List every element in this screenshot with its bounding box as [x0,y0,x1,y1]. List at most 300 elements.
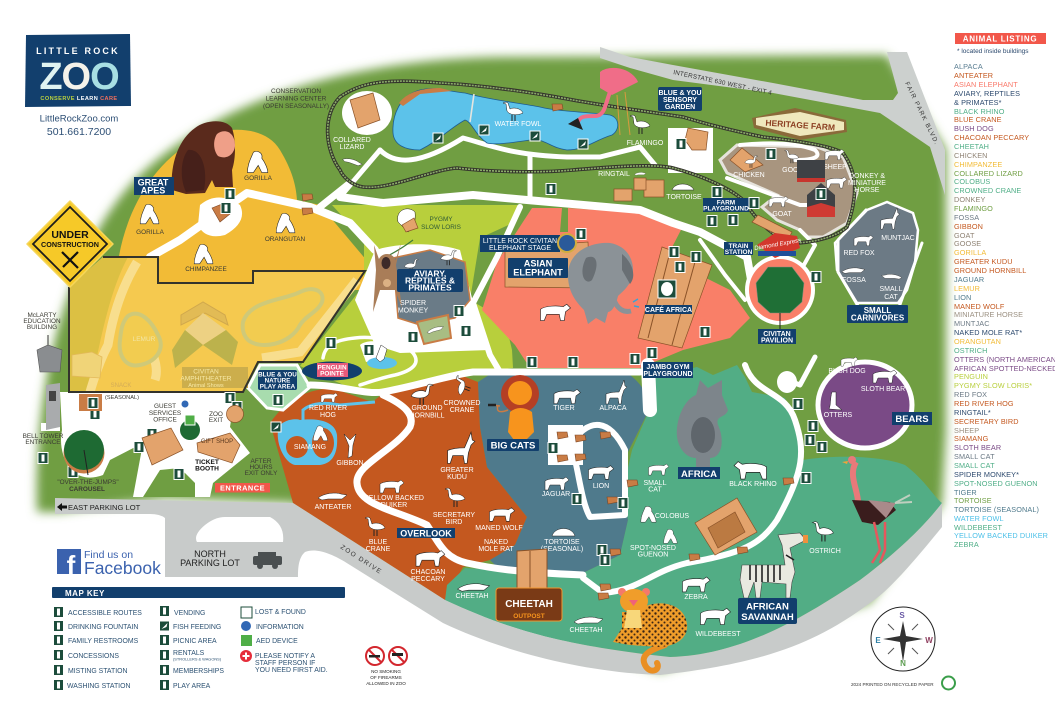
faded lemur island [120,314,161,365]
animal: ground hornbill: HORNBILL [409,412,445,420]
animal: sheep [823,149,847,171]
label: after hours exit only: AFTER [251,458,272,465]
sign: heritage farm: HERITAGE FARM [765,118,835,132]
animal: red fox [843,235,875,257]
AED icon [185,415,195,425]
label: spider monkey: SPIDER [400,300,426,307]
animal: tortoise seasonal: (SEASONAL) [541,546,583,553]
animal listing: NAKED MOLE RAT* [954,328,1022,337]
animal: red river hog [309,393,347,419]
animal: small cat africa [644,464,669,494]
building: mclarty [37,335,62,372]
label: conservation learning center: (OPEN SEASONALLY) [263,103,329,110]
animal: chicken: CHICKEN [733,172,765,179]
animal: yellow backed duiker: DUIKER [381,502,407,509]
animal listing: SIAMANG [954,434,989,443]
animal: tortoise seasonal [541,528,583,553]
label: blue and you sensory garden [658,87,702,111]
animal: collared lizard: LIZARD [340,144,364,151]
animal listing: CHEETAH [954,142,989,151]
label: after hours exit only: HOURS [249,464,273,471]
no smoking and no firearms: OF FIREARMS [370,675,402,680]
animal listing: CHICKEN [954,151,988,160]
road label: zoo drive: ZOO DRIVE [339,544,383,576]
label: african savannah [738,598,797,624]
animal: tortoise: TORTOISE [666,194,702,201]
facebook badge: Facebook [84,558,161,578]
animal: lion icon: LION [593,483,609,490]
animal: colobus: COLOBUS [655,513,689,520]
zone: farm dirt [720,145,857,237]
label: naked mole rat: MOLE RAT [478,546,514,553]
animal listing: ASIAN ELEPHANT [954,80,1018,89]
label: blue and you nature play area: BLUE & YOU [258,372,297,378]
title logo [25,34,131,107]
label: naked mole rat [478,539,514,553]
building: africa tent [695,498,757,555]
label: blue and you nature play area: PLAY AREA [260,384,296,390]
animal: secretary bird: BIRD [446,519,462,526]
website and phone [40,114,118,138]
building: goat barn [797,160,825,182]
key column 2: PICNIC AREA [173,638,217,645]
pavilion [749,259,811,330]
label: zoo exit: ZOO [209,411,223,418]
animal: gorilla west: GORILLA [136,229,165,236]
label: mclarty education building: BUILDING [27,324,57,331]
building: cafe africa [638,247,712,348]
animal: collared lizard: COLLARED [333,137,371,144]
carousel [64,430,104,475]
animal listing: DONKEY [954,195,985,204]
animal: jaguar [542,477,570,498]
key column 2: VENDING [174,610,205,617]
label: asian elephant [508,258,568,278]
label: spider monkey: MONKEY [398,308,428,314]
label: civitan pavilion: CIVITAN [763,331,791,338]
animal listing: GORILLA [954,248,986,257]
animal: gorilla west [136,204,165,236]
parking island [196,517,283,542]
animal: sloth bear: SLOTH BEAR [861,386,905,393]
animal: black rhino: BLACK RHINO [729,481,777,488]
label: civitan pavilion [758,329,796,344]
north parking lot label [180,549,240,568]
animal: yellow backed duiker [364,480,424,509]
animal: pygmy slow loris [398,209,461,232]
key column 2: FISH FEEDING [173,624,221,631]
animal: ringtail [598,171,646,178]
east parking lot label: EAST PARKING LOT [68,503,141,512]
animal: small cat carnivores: CAT [884,294,898,301]
compass: S [899,611,905,620]
label: penguin pointe: PENGUIN [317,364,347,372]
animal: donkey and miniature horse: DONKEY & [849,173,885,180]
animal listing: ZEBRA [954,540,979,549]
label: aviary reptiles and primates: PRIMATES [408,282,452,292]
compass [871,607,935,671]
key column 3: LOST & FOUND [255,609,306,616]
illustration: spider monkey [373,240,413,312]
lake bridge [470,94,474,122]
key column 2: PLAY AREA [173,683,211,690]
animal listing: PENGUIN [954,372,988,381]
animal: gibbon [336,434,364,467]
animal: gorilla east [244,151,273,182]
animal: spot-nosed guenon: SPOT-NOSED [630,545,676,552]
label: africa: AFRICA [681,469,717,480]
animal: ostrich [809,522,841,555]
label: conservation learning center: CONSERVATION [271,88,321,95]
animal listing: SHEEP [954,426,979,435]
label: farm playground: FARM [717,200,735,206]
building: tortoise shelters [614,178,664,201]
animal listing: GOAT [954,231,975,240]
animal listing: WILDEBEEST [954,523,1002,532]
label: asian elephant: ELEPHANT [513,268,563,278]
animal: penguin [376,345,387,362]
label: farm playground: PLAYGROUND [703,206,749,212]
animal: cheetah west: CHEETAH [456,593,488,600]
siamang moat [278,402,375,465]
animal listing: CROWNED CRANE [954,186,1021,195]
plaza pavement [60,392,250,497]
animal listing: ANTEATER [954,71,993,80]
animal: otters: OTTERS [824,412,853,419]
animal listing: GIBBON [954,222,983,231]
animal: chacoan peccary: PECCARY [411,576,445,583]
label: small carnivores: SMALL [864,306,891,315]
label: little rock civitan elephant stage [480,235,560,252]
faded olive band [69,257,128,392]
compass: W [925,636,933,645]
zone: big cats slate [478,373,648,573]
key column 3: PLEASE NOTIFY A [255,653,315,660]
label: aviary reptiles and primates: REPTILES & [405,276,455,286]
animal: red fox: RED FOX [843,250,875,257]
label: snack stand: SNACK [111,383,131,389]
animal: gorilla east: GORILLA [244,175,273,182]
animal: bush dog: BUSH DOG [828,368,866,375]
illustration: cheetah outpost [496,549,562,621]
illustration: big ostrich [842,456,912,563]
animal: red river hog: RED RIVER [309,405,347,412]
label: small carnivores [847,305,908,323]
animal: tortoise seasonal: TORTOISE [544,539,580,546]
label: blue and you sensory garden: BLUE & YOU [658,90,702,97]
facebook badge: Find us on [84,549,133,561]
faded stand [72,352,102,378]
animal listing: TORTOISE (SEASONAL) [954,505,1039,514]
label: train station: TRAIN [729,243,749,250]
no smoking and no firearms: NO SMOKING [371,669,401,674]
label: conservation learning center [263,88,329,110]
animal: goose [782,150,808,174]
animal listing: ALPACA [954,62,983,71]
illustration: rhino [677,380,728,467]
shelter: apes picnic [212,204,230,222]
animal: donkey and miniature horse: HORSE [855,187,880,194]
label: penguin pointe: POINTE [320,370,345,378]
building: learning center [350,93,380,128]
animal: otters [824,392,853,419]
animal: tiger [553,389,580,412]
stage: elephant stage [505,242,590,288]
animal listing: MANED WOLF [954,302,1005,311]
label: carousel [57,479,119,493]
animal: water fowl [495,102,541,128]
label: aviary reptiles and primates [397,268,463,292]
icon: parking jeep [253,552,282,569]
animal: maned wolf: MANED WOLF [475,525,523,532]
key column 2 [160,606,224,690]
animal: small cat carnivores: SMALL [880,286,903,293]
zone: asian elephant salmon [482,208,750,368]
label: carousel: CAROUSEL [69,486,105,493]
website and phone: 501.661.7200 [47,126,111,138]
label: naked mole rat: NAKED [484,539,508,546]
faded pond [243,289,323,345]
animal listing: BLUE CRANE [954,115,1002,124]
animal listing: WATER FOWL [954,514,1004,523]
north parking lot label: PARKING LOT [180,558,240,568]
label: train station: STATION [725,249,753,256]
animal listing: FOSSA [954,213,979,222]
animal: crowned crane: CRANE [450,407,475,414]
animal listing: ORANGUTAN [954,337,1001,346]
animal: siamang: SIAMANG [294,444,326,451]
map key [52,587,345,690]
label: african savannah: AFRICAN [746,602,789,612]
label: jambo gym playground [643,362,693,378]
animal: small cat carnivores [880,274,903,301]
facebook badge [57,549,161,580]
key column 2: MEMBERSHIPS [173,668,224,675]
animal listing: GROUND HORNBILL [954,266,1026,275]
animal listing: LEMUR [954,284,980,293]
label: civitan pavilion: PAVILION [761,338,793,344]
faded amphitheater [172,302,238,368]
animal: tortoise [666,184,702,201]
animal listing: FLAMINGO [954,204,993,213]
animal listing: BLACK RHINO [954,107,1005,116]
label: ticket booth [195,459,219,472]
label: blue and you nature play area [258,370,297,390]
zone: overlook brown [270,375,527,600]
key column 1: ACCESSIBLE ROUTES [68,610,142,617]
animal listing: SPOT-NOSED GUENON [954,479,1038,488]
label: bell tower entrance [23,433,64,446]
animal: asian elephant icon [540,304,570,320]
animal: donkey and miniature horse: MINIATURE [848,180,886,187]
label: great apes: APES [141,186,165,196]
animal: muntjac: MUNTJAC [881,235,915,242]
lawn hump [143,468,195,497]
animal listing: TORTOISE [954,496,992,505]
animal listing: RED FOX [954,390,987,399]
key column 3: YOU NEED FIRST AID. [255,667,328,674]
animal: cheetah west [456,584,490,600]
sign: heritage farm [752,108,847,140]
animal listing: SPIDER MONKEY* [954,470,1019,479]
label: train station [724,242,753,256]
label: mclarty education building: EDUCATION [23,318,61,325]
key column 1: FAMILY RESTROOMS [68,638,139,645]
park grounds base [37,55,946,672]
label: farm playground [703,198,749,212]
animal: secretary bird [433,488,475,526]
key column 1 [54,606,142,690]
animal listing: BUSH DOG [954,124,994,133]
animal listing: GOOSE [954,239,981,248]
animal: greater kudu: GREATER [440,467,474,474]
animal: pygmy slow loris: PYGMY [429,216,453,223]
key column 2: RENTALS [173,650,205,657]
animal: gibbon: GIBBON [336,460,364,467]
zone: nature play area [248,365,310,410]
label: bell tower entrance: BELL TOWER [23,433,64,440]
road label: fair park: FAIR PARK BLVD. [903,81,940,147]
animal: secretary bird: SECRETARY [433,512,475,519]
key column 3: STAFF PERSON IF [255,660,315,667]
gift shop building: GIFT SHOP [201,439,233,445]
guest services building [142,400,188,465]
label: snack stand: (SEASONAL) [105,395,139,401]
compass: N [900,659,906,668]
faded paths [90,262,357,392]
label: cafe africa: CAFÉ AFRICA [645,305,692,314]
map key bar [52,587,345,598]
illustration: cheetah outpost: CHEETAH [505,599,553,610]
animal: cheetah east: CHEETAH [570,627,602,634]
animal listing [954,62,1055,549]
compass: E [875,636,881,645]
label: small carnivores: CARNIVORES [851,314,905,322]
animal: goose: GOOSE [782,167,808,174]
faded amphitheater label: AMPHITHEATER [180,376,232,382]
animal: blue crane: BLUE [369,539,387,546]
ticket booth roof [180,420,200,440]
animal: flamingo: FLAMINGO [627,140,664,147]
animal: chacoan peccary [410,551,446,583]
animal: maned wolf [475,508,523,532]
animal: colobus [641,506,689,522]
animal: lion icon [588,466,614,490]
animal listing: SMALL CAT [954,452,995,461]
seal: civitan [558,234,576,252]
animal: chimpanzee: CHIMPANZEE [185,266,227,273]
under construction sign: CONSTRUCTION [41,240,99,249]
animal: orangutan: ORANGUTAN [265,236,306,243]
illustration: big elephant [568,243,639,324]
label: great apes: GREAT [138,178,169,188]
label: great apes [134,177,174,196]
label: mclarty education building: McLARTY [27,312,57,319]
label: blue and you sensory garden: SENSORY [663,97,697,104]
label: guest services office: OFFICE [153,416,177,424]
label: jambo gym playground: JAMBO GYM [646,364,690,371]
under construction sign: UNDER [51,229,89,241]
animal: fossa [842,268,866,284]
animal: cheetah east [570,617,603,634]
animal listing: RINGTAIL* [954,408,991,417]
animal: donkey and miniature horse [826,173,886,194]
key column 1: MISTING STATION [68,668,127,675]
animal: orangutan [265,213,306,243]
animal: siamang [294,426,328,451]
animal listing: SLOTH BEAR [954,443,1001,452]
animal: muntjac [881,208,915,242]
animal listing: OTTERS (NORTH AMERICAN [954,355,1055,364]
animal: zebra: ZEBRA [684,594,708,601]
label: overlook: OVERLOOK [400,528,452,538]
zone: lime aviary area [300,205,520,392]
animal: zebra [682,577,710,601]
label: blue and you nature play area: NATURE [265,378,290,384]
animal listing: SMALL CAT [954,461,995,470]
animal: red river hog: HOG [320,412,336,419]
illustration: big flamingo [568,68,638,135]
animal: small cat africa: SMALL [644,480,667,487]
road: zoo drive and parking lots [55,498,942,675]
zone: bears [818,362,912,448]
animal: alpaca [599,380,627,412]
zone: africa and savannah green [445,365,942,657]
animal listing: COLOBUS [954,177,990,186]
website and phone: LittleRockZoo.com [40,114,118,124]
key column 3: INFORMATION [256,624,304,631]
animal: crowned crane: CROWNED [444,400,480,407]
animal listing: AVIARY, REPTILES [954,89,1020,98]
road: interstate 630 and fair park blvd [600,47,945,195]
label: snack stand [105,383,139,401]
lakeside rocks [399,88,452,106]
animal: goat: GOAT [772,211,792,218]
faded lemur label: LEMUR [133,336,156,343]
label: zoo exit [209,411,223,424]
under construction area [69,257,365,392]
animal: blue crane [365,517,391,553]
animal: small cat africa: CAT [648,486,662,494]
animal listing: GREATER KUDU [954,257,1013,266]
pavement blobs [198,91,815,465]
label: guest services office: SERVICES [149,410,181,417]
animal: spot-nosed guenon [630,529,677,558]
faded amphitheater label: Animal Shows [188,383,224,389]
label: mclarty education building [23,312,61,331]
road label: interstate: INTERSTATE 630 WEST - EXIT 4 [673,69,773,97]
map key bar: MAP KEY [65,589,105,598]
animal: goat [769,196,792,218]
animal listing: CHIMPANZEE [954,160,1002,169]
building: train station [752,215,792,240]
railroad [328,81,855,243]
label: ticket booth: TICKET [195,459,219,466]
animal: ostrich: OSTRICH [809,548,841,555]
animal listing: TIGER [954,488,977,497]
illustration: lion [488,375,539,440]
animal: ringtail: RINGTAIL [598,171,630,178]
north parking lot label: NORTH [194,549,226,559]
animal listing: YELLOW BACKED DUIKER [954,531,1048,540]
animal: bush dog [828,357,866,375]
animal: pygmy slow loris: SLOW LORIS [421,224,461,231]
animal listing heading [955,33,1046,44]
label: conservation learning center: LEARNING CENTER [266,96,327,102]
animal listing heading: ANIMAL LISTING [963,34,1037,44]
title logo: CONSERVE LEARN CARE [40,96,118,102]
animal: anteater [315,493,351,511]
